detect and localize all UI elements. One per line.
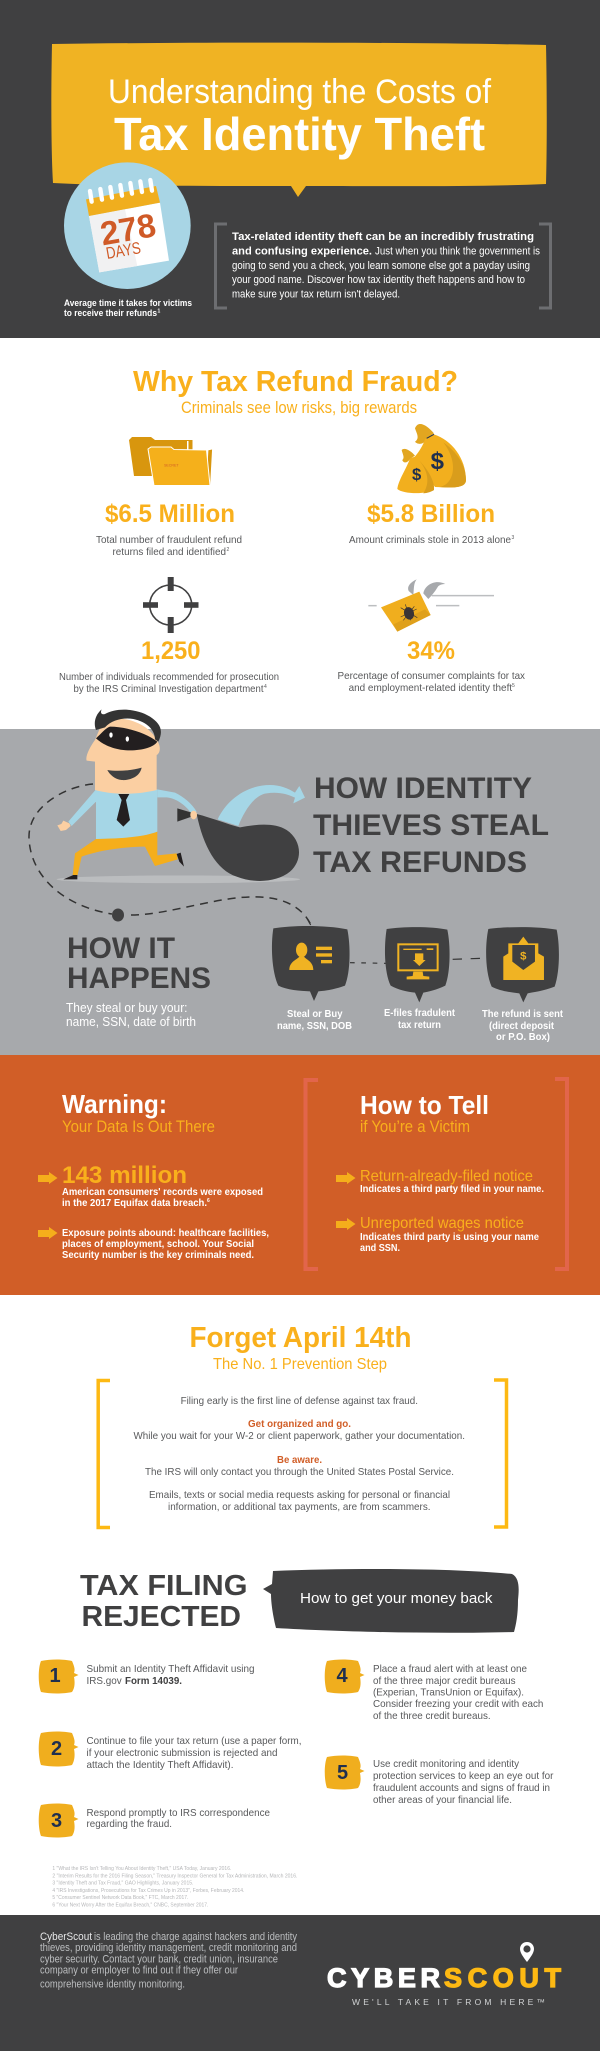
heading: how it happens: HOW IT xyxy=(67,932,175,965)
process labels: Steal or Buy xyxy=(287,1008,343,1020)
route dot xyxy=(112,908,124,922)
heading: TAX FILING xyxy=(80,1570,248,1602)
stat: 5.8 billion: $5.8 Billion xyxy=(367,500,495,528)
stat: 5.8 billion: Amount criminals stole in 2013 alone xyxy=(349,534,511,546)
intro text: going to send you a check, you learn somone else got a payday using xyxy=(232,260,530,272)
stat: 143 million: 143 million xyxy=(62,1162,187,1189)
step 2: Continue to file your tax return (use a paper form, xyxy=(86,1735,302,1747)
how it happens text: They steal or buy your: xyxy=(66,1000,188,1015)
step 5: protection services to keep an eye out for xyxy=(373,1770,554,1782)
step 5: 5 xyxy=(337,1762,348,1784)
bubble text: How to get your money back xyxy=(300,1590,493,1607)
unreported wages notice xyxy=(360,1215,539,1254)
step 5 xyxy=(325,1756,554,1806)
heading xyxy=(133,366,458,417)
step 1 xyxy=(39,1660,255,1694)
intro brackets xyxy=(216,224,550,308)
intro text: make sure your tax return isn't delayed. xyxy=(232,288,400,300)
step 1: Submit an Identity Theft Affidavit using xyxy=(86,1663,255,1675)
calendar caption: Average time it takes for victims xyxy=(64,298,192,309)
icon: folders: SECRET xyxy=(164,464,179,468)
stat: 6.5 million: returns filed and identified xyxy=(112,546,226,558)
prevention text: The IRS will only contact you through the United States Postal Service. xyxy=(145,1466,454,1478)
footnotes: 3 "Identity Theft and Tax Fraud," GAO Highlights, January 2015. xyxy=(52,1880,194,1886)
heading: Criminals see low risks, big rewards xyxy=(181,398,417,417)
footnotes: 4 "IRS Investigations, Prosecutions for Tax Crimes Up in 2013", Forbes, February 2014. xyxy=(52,1888,245,1894)
step 1: IRS.gov xyxy=(86,1675,122,1687)
panel: forget april 14th xyxy=(98,1322,506,1528)
intro text: Tax-related identity theft can be an incredibly frustrating xyxy=(232,231,534,243)
heading: how identity thieves steal xyxy=(313,772,549,879)
panel: how identity thieves steal xyxy=(0,709,600,1055)
process labels: The refund is sent xyxy=(482,1008,563,1020)
return-already-filed notice: Indicates a third party filed in your name. xyxy=(360,1183,544,1195)
process icons xyxy=(272,917,559,1002)
footnotes: 5 "Consumer Sentinel Network Data Book," FTC, March 2017. xyxy=(52,1895,189,1901)
step 2: attach the Identity Theft Affidavit). xyxy=(86,1759,234,1771)
exposure points text xyxy=(62,1227,269,1261)
stat: 143 million: 6 xyxy=(207,1198,210,1204)
return-already-filed notice: Return-already-filed notice xyxy=(360,1168,533,1185)
process labels: tax return xyxy=(398,1019,441,1031)
step 2 xyxy=(39,1732,302,1771)
heading: how identity thieves steal: THIEVES STEAL xyxy=(313,809,549,842)
stat: 6.5 million: $6.5 Million xyxy=(105,500,235,528)
stat: 143 million: American consumers' records were exposed xyxy=(62,1186,263,1198)
stat: 1,250: 4 xyxy=(264,684,267,690)
how it happens text: name, SSN, date of birth xyxy=(66,1014,196,1029)
process labels: or P.O. Box) xyxy=(496,1031,550,1043)
return-already-filed notice xyxy=(360,1168,544,1195)
icon: money bags: $ xyxy=(431,448,444,475)
prevention text: Get organized and go. xyxy=(248,1418,351,1430)
prevention text: Be aware. xyxy=(277,1454,322,1466)
intro text: your good name. Discover how tax identity theft happens and how to xyxy=(232,274,525,286)
brackets xyxy=(306,1079,567,1269)
footer text: is leading the charge against hackers and identity xyxy=(94,1931,297,1943)
heading: how it happens xyxy=(67,932,211,995)
title speech bubble xyxy=(51,43,547,197)
stat: 1,250: Number of individuals recommended for prosecution xyxy=(59,671,279,683)
arrows xyxy=(38,1172,356,1239)
step 3: 3 xyxy=(51,1810,62,1832)
step 4: Place a fraud alert with at least one xyxy=(373,1663,527,1675)
prevention text xyxy=(134,1395,465,1513)
step 3: regarding the fraud. xyxy=(86,1818,172,1830)
dashed route xyxy=(29,784,311,925)
icon: flying envelope with bug xyxy=(368,579,494,632)
prevention text: While you wait for your W-2 or client paperwork, gather your documentation. xyxy=(134,1430,465,1442)
icon: calendar 278 days: 278 xyxy=(98,207,159,253)
step 4: of the three major credit bureaus xyxy=(373,1675,516,1687)
stat: 34%: Percentage of consumer complaints for tax xyxy=(338,670,526,682)
icon: calendar 278 days xyxy=(64,162,191,289)
step 4 xyxy=(325,1660,544,1722)
icon: e-file monitor xyxy=(385,927,450,1002)
icon: money bags: $ xyxy=(412,465,422,484)
brackets xyxy=(98,1380,506,1528)
stat: 1,250: 1,250 xyxy=(141,637,200,665)
panel: warning and how to tell xyxy=(0,1055,600,1295)
icon: calendar 278 days: DAYS xyxy=(104,238,142,263)
footnotes: 1 "What the IRS Isn't Telling You About Identity Theft," USA Today, January 2016. xyxy=(52,1866,232,1872)
prevention text: Emails, texts or social media requests asking for personal or financial xyxy=(149,1489,450,1501)
step 5: Use credit monitoring and identity xyxy=(373,1758,520,1770)
panel: footer xyxy=(0,1915,600,2051)
step 2: 2 xyxy=(51,1738,62,1760)
heading: warning: Your Data Is Out There xyxy=(62,1117,215,1136)
process labels: name, SSN, DOB xyxy=(277,1020,352,1032)
panel: why tax refund fraud xyxy=(59,366,526,695)
heading: REJECTED xyxy=(82,1601,241,1633)
step 2: if your electronic submission is rejected and xyxy=(86,1747,278,1759)
footnotes: 2 "Interim Results for the 2016 Filing Season," Treasury Inspector General for Tax Administration, March 2016. xyxy=(52,1874,298,1880)
stat: 6.5 million: 2 xyxy=(226,547,230,553)
step 1: 1 xyxy=(49,1665,61,1687)
step 4: of the three credit bureaus. xyxy=(373,1710,491,1722)
intro text: and confusing experience. xyxy=(232,246,372,258)
process labels xyxy=(277,1007,563,1043)
footer text: thieves, providing identity management, credit monitoring and xyxy=(40,1942,297,1954)
step 4: Consider freezing your credit with each xyxy=(373,1698,544,1710)
icon: refund envelope: $ xyxy=(520,950,527,962)
unreported wages notice: Indicates third party is using your name xyxy=(360,1231,539,1243)
calendar caption xyxy=(64,298,192,319)
process labels: (direct deposit xyxy=(489,1020,554,1032)
title xyxy=(108,73,492,160)
icon: refund envelope xyxy=(486,927,559,1002)
heading: how identity thieves steal: HOW IDENTITY xyxy=(314,772,532,805)
heading xyxy=(190,1322,412,1373)
stat: 1,250: by the IRS Criminal Investigation department xyxy=(74,683,264,695)
footer text: CyberScout xyxy=(40,1931,92,1943)
stat: 143 million: in the 2017 Equifax data breach. xyxy=(62,1197,207,1209)
title: Tax Identity Theft xyxy=(114,108,485,160)
logo: cyberscout xyxy=(327,1942,562,2007)
panel: tax filing rejected xyxy=(39,1569,554,1838)
heading: Forget April 14th xyxy=(190,1322,412,1354)
unreported wages notice: Unreported wages notice xyxy=(360,1215,524,1232)
exposure points text: places of employment, school. Your Social xyxy=(62,1238,254,1250)
icon: crosshair xyxy=(143,577,198,633)
exposure points text: Exposure points abound: healthcare facilities, xyxy=(62,1227,269,1239)
process labels: E-files fradulent xyxy=(384,1007,455,1019)
heading: how to tell xyxy=(360,1090,489,1136)
heading: how to tell: How to Tell xyxy=(360,1090,489,1120)
intro text xyxy=(232,231,540,300)
step 3: Respond promptly to IRS correspondence xyxy=(86,1807,270,1819)
stat: 5.8 billion xyxy=(349,500,514,546)
prevention text: Filing early is the first line of defense against tax fraud. xyxy=(181,1395,418,1407)
heading xyxy=(80,1570,248,1633)
heading: warning: Warning: xyxy=(62,1089,167,1119)
footer text: comprehensive identity monitoring. xyxy=(40,1978,185,1990)
dark speech bubble xyxy=(263,1569,519,1633)
heading: how identity thieves steal: TAX REFUNDS xyxy=(313,846,527,879)
panel: header xyxy=(0,0,600,338)
footer text xyxy=(40,1931,297,1990)
heading: The No. 1 Prevention Step xyxy=(213,1356,387,1373)
calendar caption: to receive their refunds xyxy=(64,308,157,319)
stat: 34%: 5 xyxy=(512,683,515,689)
stat: 143 million xyxy=(62,1162,263,1209)
heading: warning xyxy=(62,1089,215,1136)
step 5: other areas of your financial life. xyxy=(373,1794,512,1806)
footnotes xyxy=(52,1866,298,1908)
stat: 1,250 xyxy=(59,637,279,695)
stat: 34% xyxy=(338,637,526,694)
stat: 6.5 million: Total number of fraudulent refund xyxy=(96,534,242,546)
stat: 34%: 34% xyxy=(407,637,455,665)
step 5: fraudulent accounts and signs of fraud in xyxy=(373,1782,550,1794)
step 1: Form 14039. xyxy=(125,1675,182,1687)
footer text: company or employer to find out if they offer our xyxy=(40,1964,238,1976)
logo: cyberscout: CYBER xyxy=(327,1963,440,1993)
heading: Why Tax Refund Fraud? xyxy=(133,366,458,398)
icon: steal or buy identity xyxy=(272,926,350,1001)
prevention text: information, or additional tax payments, are from scammers. xyxy=(168,1501,430,1513)
logo: cyberscout: WE'LL TAKE IT FROM HERE™ xyxy=(352,1997,545,2007)
heading: how to tell: if You’re a Victim xyxy=(360,1117,470,1136)
icon: folders xyxy=(129,437,212,486)
step 4: (Experian, TransUnion or Equifax). xyxy=(373,1686,524,1698)
unreported wages notice: and SSN. xyxy=(360,1242,400,1254)
stat: 5.8 billion: 3 xyxy=(512,535,514,541)
heading: how it happens: HAPPENS xyxy=(67,962,211,995)
step 4: 4 xyxy=(336,1665,348,1687)
step 3 xyxy=(39,1804,270,1838)
icon: money bags xyxy=(397,424,466,493)
title: Understanding the Costs of xyxy=(108,73,492,111)
calendar caption: 1 xyxy=(158,308,160,314)
exposure points text: Security number is the key criminals need. xyxy=(62,1249,254,1261)
illustration: thief with sack xyxy=(57,709,305,883)
footer text: cyber security. Contact your bank, credit union, insurance xyxy=(40,1954,278,1966)
logo: cyberscout: SCOUT xyxy=(444,1963,562,1993)
stat: 34%: and employment-related identity theft xyxy=(349,682,512,694)
footnotes: 6 "Your Next Worry After the Equifax Breach," CNBC, September 2017. xyxy=(52,1902,209,1908)
stat: 6.5 million xyxy=(96,500,242,558)
intro text: Just when you think the government is xyxy=(375,246,540,258)
how it happens text xyxy=(66,1000,196,1029)
